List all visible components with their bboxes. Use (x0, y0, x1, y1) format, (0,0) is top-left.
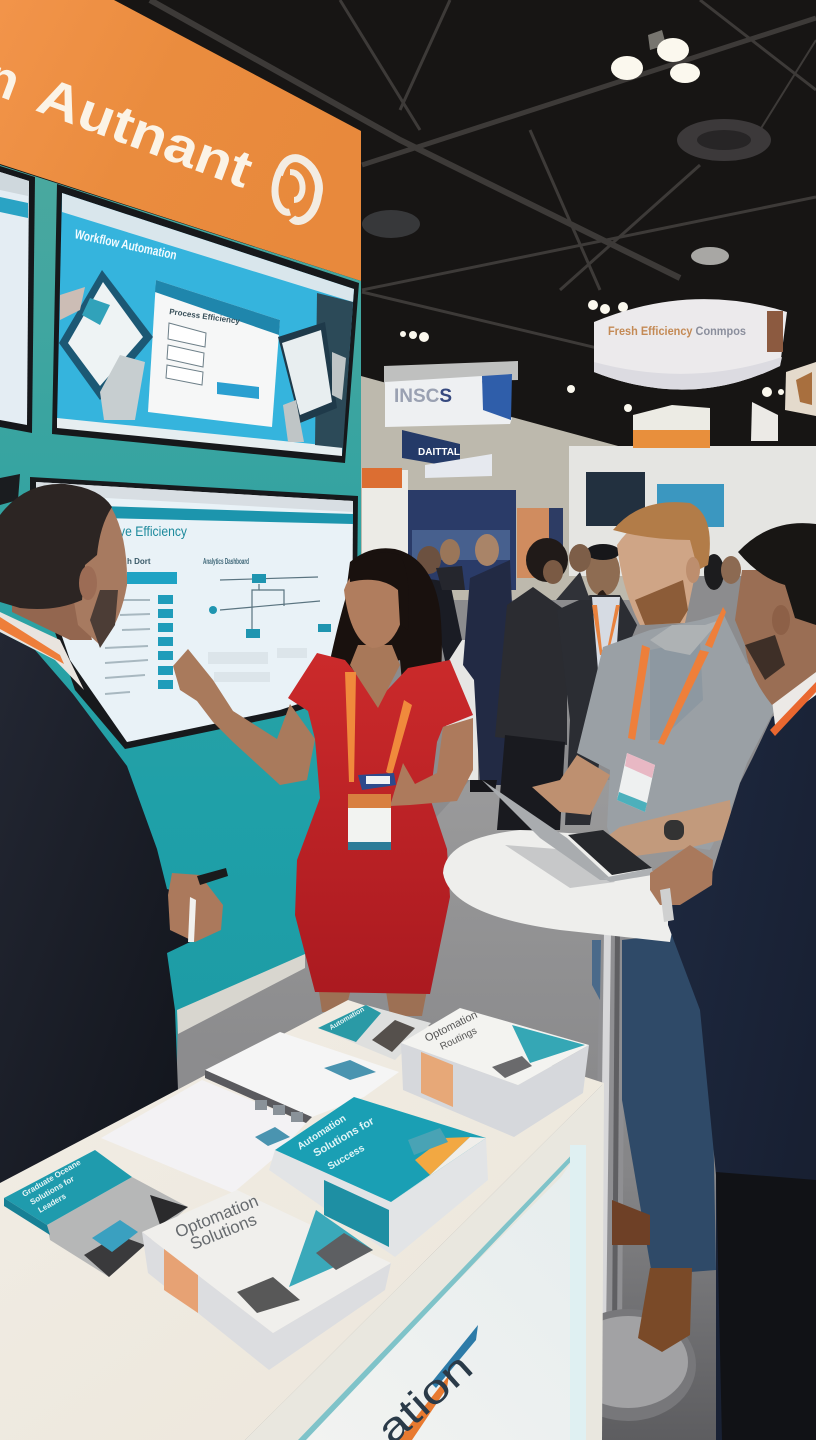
jeans (622, 930, 716, 1275)
laptop shadow (505, 845, 615, 888)
brochure: left teal: Leaders (36, 1191, 68, 1215)
beard (745, 635, 785, 680)
hanging signs (384, 361, 816, 478)
person: woman presenter (173, 548, 473, 1016)
brochure stack: back right (401, 1008, 589, 1137)
display counter (0, 1000, 604, 1440)
brochure: left teal (4, 1150, 188, 1277)
keyboard (568, 830, 652, 875)
lanyard (0, 617, 64, 664)
wall skirting (177, 954, 305, 1034)
hair (613, 502, 710, 570)
ceiling diffuser (677, 119, 771, 161)
beard (90, 590, 118, 648)
hanging signs: INSCS (394, 386, 452, 407)
hair (0, 484, 112, 609)
brochure: teal back: Automation (328, 1006, 366, 1032)
phone (358, 773, 396, 790)
monitor: efficiency dashboard: h Dort (127, 557, 151, 566)
red dress (288, 653, 473, 994)
lanyard (770, 682, 816, 736)
pen (197, 868, 228, 885)
round table (560, 930, 696, 1421)
person: man in grey shirt (532, 502, 785, 1352)
distant man left (417, 539, 465, 665)
ear (686, 557, 700, 583)
left forearm and hand (532, 755, 610, 815)
hands (650, 845, 713, 905)
floor (178, 780, 816, 1440)
table top (443, 830, 680, 942)
face (72, 505, 127, 645)
monitor: efficiency dashboard (30, 477, 358, 749)
beard (635, 580, 688, 625)
collar (772, 672, 816, 725)
pole (593, 930, 625, 1335)
brochure stack: front: Solutions (187, 1210, 259, 1254)
person: left man in suit (0, 484, 228, 1190)
wrist watch (660, 888, 674, 922)
woman left arm and hand (173, 649, 315, 785)
laptop (482, 780, 652, 888)
badge (617, 753, 655, 812)
brochure stack: center teal: Solutions for (312, 1115, 377, 1160)
orange banner (0, 0, 361, 281)
right tablet (278, 322, 337, 423)
ear (772, 605, 790, 635)
brochure stack: center teal: Success (326, 1143, 367, 1173)
monitor: efficiency dashboard: ye Efficiency (119, 523, 187, 539)
side list (105, 572, 177, 694)
booth monitor left (586, 472, 645, 526)
brochure stack: front: Optomation (172, 1191, 261, 1242)
far exhibit booths (362, 446, 816, 780)
banner logo (275, 158, 319, 221)
bearded man in background (557, 544, 637, 825)
far hall wall (361, 376, 640, 600)
base edge (603, 868, 652, 882)
counter logo (369, 1325, 481, 1440)
woman legs (318, 985, 428, 1016)
shoes (612, 1200, 650, 1245)
orange lanyard (345, 672, 412, 782)
id badge (348, 794, 391, 850)
monitor: efficiency dashboard: Analytics Dashboard (203, 557, 249, 566)
brochure stack: front (142, 1190, 391, 1370)
hair (738, 523, 816, 625)
teal wall (0, 165, 361, 1130)
base (560, 1309, 696, 1421)
ear (79, 566, 97, 600)
brochure: left teal: Graduate Oceane (20, 1158, 83, 1199)
brochure: teal back (318, 1005, 431, 1060)
monitor: workflow automation (52, 184, 359, 463)
neck and face (735, 570, 816, 705)
hand and cuff (168, 873, 223, 942)
jacket (0, 632, 192, 1190)
navy suit man (463, 534, 515, 792)
booth monitor right (657, 484, 724, 527)
flow diagram (220, 577, 320, 630)
background crowd (417, 534, 741, 830)
person: right man in navy (650, 523, 816, 1440)
brochure stack: center teal: Automation (296, 1113, 348, 1153)
right forearm and hand (593, 800, 733, 857)
monitor: workflow automation: Process Efficiency (169, 307, 241, 326)
woman hair parting (350, 553, 409, 630)
monitor: workflow automation: Workflow Automation (73, 226, 178, 263)
brochure stack: back right: Optomation (423, 1009, 479, 1045)
woman right arm (390, 718, 473, 806)
denim behind pole (592, 940, 601, 1000)
hanging signs: DAITTAL (418, 447, 460, 458)
process window (148, 280, 280, 427)
lanyard (628, 607, 726, 745)
man in black suit back (495, 538, 590, 830)
jacket and trousers (668, 690, 816, 1440)
woman hair (325, 548, 442, 718)
grey shirt (577, 613, 785, 850)
lid (482, 780, 612, 880)
woman neck and chest (350, 645, 400, 708)
shirt collar (0, 612, 84, 690)
face (617, 514, 698, 625)
collar (650, 620, 720, 655)
monitor: small left fragment (0, 474, 20, 505)
monitor: left edge (0, 166, 35, 433)
woman face (344, 568, 404, 648)
left tablet (59, 270, 153, 400)
ceiling (0, 0, 816, 480)
brochure stack: center teal (269, 1097, 488, 1257)
counter top (0, 1000, 604, 1440)
neck (12, 590, 92, 640)
brochure: left teal: Solutions for (28, 1174, 76, 1207)
round hanging banner (594, 299, 787, 390)
brochure stack: back right: Routings (438, 1026, 479, 1053)
ceiling lights (400, 30, 784, 412)
orange banner: Autnant (30, 67, 260, 200)
flat papers (101, 1032, 399, 1193)
watch (664, 820, 684, 840)
dark right panel (315, 293, 353, 448)
round hanging banner: Fresh Efficiency Conmpos (608, 326, 746, 338)
front face (245, 1083, 604, 1440)
